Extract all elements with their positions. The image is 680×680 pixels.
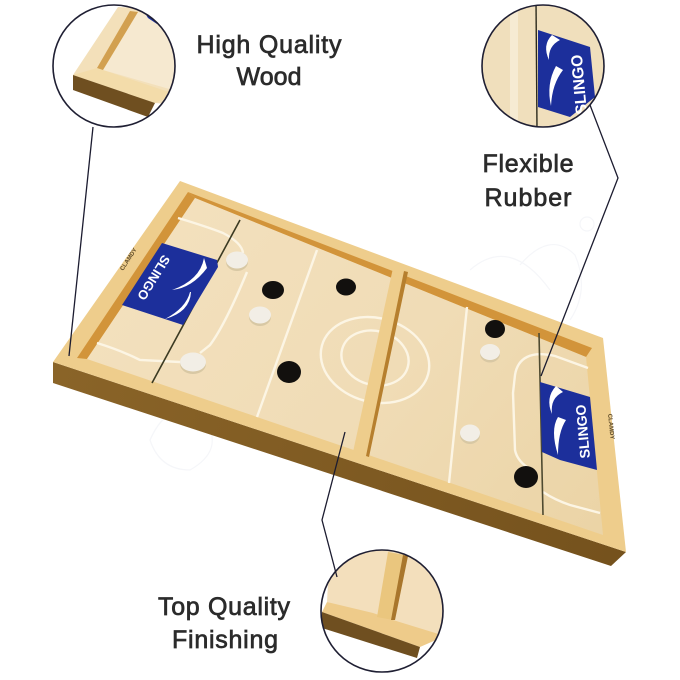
label: high quality wood: High Quality <box>196 31 342 59</box>
label: flexible rubber: Flexible <box>482 150 574 178</box>
right board brand text: CLAMDY <box>606 414 615 440</box>
black pucks <box>262 278 538 488</box>
leader line: high quality wood <box>69 127 93 356</box>
right goal line <box>539 333 543 515</box>
right rink markings <box>449 307 600 513</box>
leader line: flexible rubber <box>541 105 618 376</box>
board <box>53 181 626 566</box>
playing floor <box>87 198 603 535</box>
label: flexible rubber: Rubber <box>484 184 572 212</box>
centre divider <box>353 268 408 457</box>
label: top quality finishing: Top Quality <box>158 593 290 621</box>
left rail inner wall <box>77 192 195 359</box>
label: top quality finishing <box>158 593 290 654</box>
left logo <box>122 243 218 325</box>
label: high quality wood: Wood <box>236 63 302 91</box>
label: top quality finishing: Finishing <box>172 626 278 654</box>
leader line: top quality finishing <box>322 432 345 577</box>
watermark <box>150 217 594 470</box>
board rim <box>53 181 626 552</box>
left logo: SLINGO <box>134 252 173 303</box>
callout: flexible rubber: SLINGO <box>569 54 591 115</box>
callout: high quality wood <box>50 0 180 130</box>
top rail inner wall <box>188 192 592 357</box>
callout: flexible rubber <box>480 0 610 130</box>
right logo: SLINGO <box>572 404 593 459</box>
callout: top quality finishing <box>320 549 444 673</box>
white pucks <box>180 252 500 444</box>
centre circles <box>311 305 439 415</box>
left rink markings <box>97 218 317 417</box>
label: high quality wood <box>196 31 342 91</box>
left board brand text: CLAMDY <box>120 247 139 272</box>
left goal line <box>152 220 240 383</box>
board front face <box>53 362 626 566</box>
right logo <box>540 382 597 470</box>
label: flexible rubber <box>482 150 574 212</box>
